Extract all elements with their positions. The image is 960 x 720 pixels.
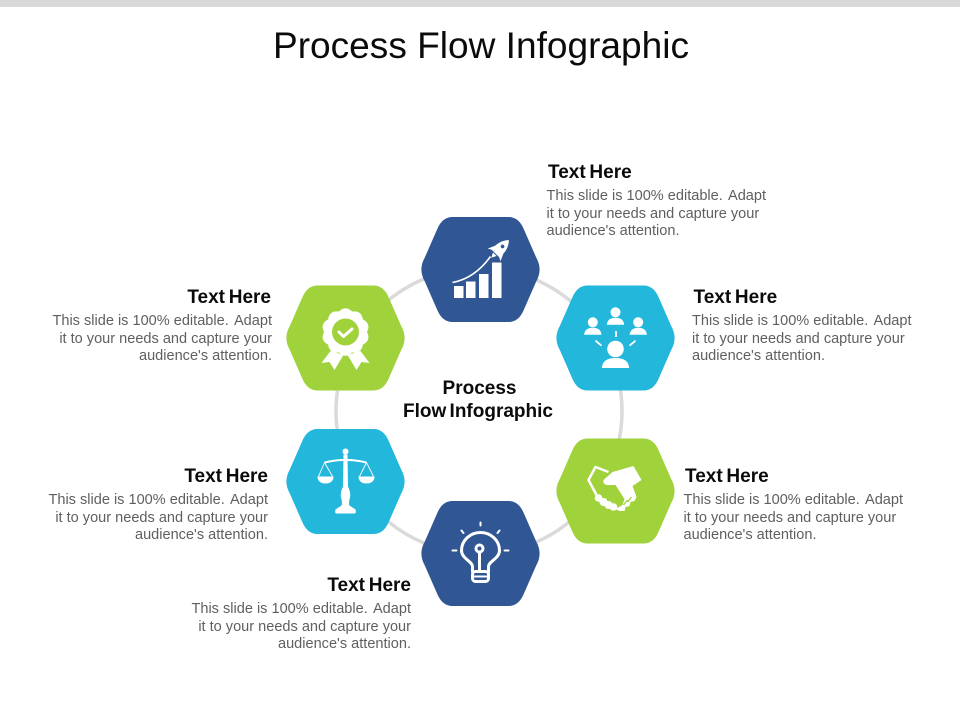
top bar bbox=[0, 0, 960, 7]
text block: upper right: Text Here bbox=[694, 287, 777, 308]
text block: top: Text Here bbox=[548, 162, 632, 183]
text block: bottom: Text Here bbox=[327, 575, 411, 596]
center label: Flow Infographic bbox=[403, 401, 553, 422]
icon: people network bbox=[584, 307, 647, 368]
text block: lower right: This slide is 100% editable. Adapt bbox=[684, 492, 903, 508]
text block: upper left: This slide is 100% editable. Adapt bbox=[52, 313, 272, 329]
text block: top bbox=[546, 162, 766, 239]
text block: upper left: it to your needs and capture your bbox=[59, 331, 272, 347]
hexagon: scales bbox=[286, 429, 405, 534]
text block: upper left: audience's attention. bbox=[139, 348, 272, 364]
hexagon: award bbox=[286, 286, 405, 390]
hexagon: handshake bbox=[556, 438, 675, 544]
title: Process Flow Infographic bbox=[273, 25, 689, 66]
text block: top: it to your needs and capture your bbox=[546, 206, 759, 222]
center label bbox=[403, 378, 553, 422]
hexagon: growth chart bbox=[421, 217, 540, 322]
icon: handshake bbox=[588, 466, 642, 511]
text block: bottom: This slide is 100% editable. Adapt bbox=[191, 601, 411, 617]
text block: top: audience's attention. bbox=[546, 223, 680, 239]
text block: upper right: it to your needs and capture your bbox=[692, 331, 905, 347]
text block: lower left: it to your needs and capture your bbox=[55, 510, 268, 526]
text block: bottom: it to your needs and capture your bbox=[198, 619, 411, 635]
text block: bottom bbox=[191, 575, 411, 652]
icon: light bulb bbox=[452, 522, 508, 582]
icon: balance scales bbox=[318, 448, 374, 514]
text block: upper left bbox=[52, 287, 272, 364]
center label: Process bbox=[443, 378, 516, 399]
text block: upper right bbox=[692, 287, 912, 364]
text block: lower left: audience's attention. bbox=[135, 527, 268, 543]
text block: bottom: audience's attention. bbox=[278, 636, 411, 652]
text block: top: This slide is 100% editable. Adapt bbox=[546, 188, 766, 204]
text block: lower right: it to your needs and capture your bbox=[684, 510, 896, 526]
text block: upper left: Text Here bbox=[187, 287, 271, 308]
connecting ring bbox=[336, 268, 622, 554]
hexagon: idea bulb bbox=[421, 501, 540, 606]
text block: lower left: Text Here bbox=[184, 466, 268, 487]
text block: upper right: This slide is 100% editable. Adapt bbox=[692, 313, 912, 329]
text block: lower left: This slide is 100% editable. Adapt bbox=[48, 492, 268, 508]
text block: lower left bbox=[48, 466, 268, 543]
hexagon: team bbox=[556, 286, 675, 390]
text block: lower right: audience's attention. bbox=[684, 527, 816, 543]
text block: lower right: Text Here bbox=[685, 466, 769, 487]
icon: award ribbon bbox=[322, 308, 370, 370]
text block: upper right: audience's attention. bbox=[692, 348, 825, 364]
text block: lower right bbox=[684, 466, 903, 543]
icon: rocket and bars bbox=[452, 234, 515, 298]
